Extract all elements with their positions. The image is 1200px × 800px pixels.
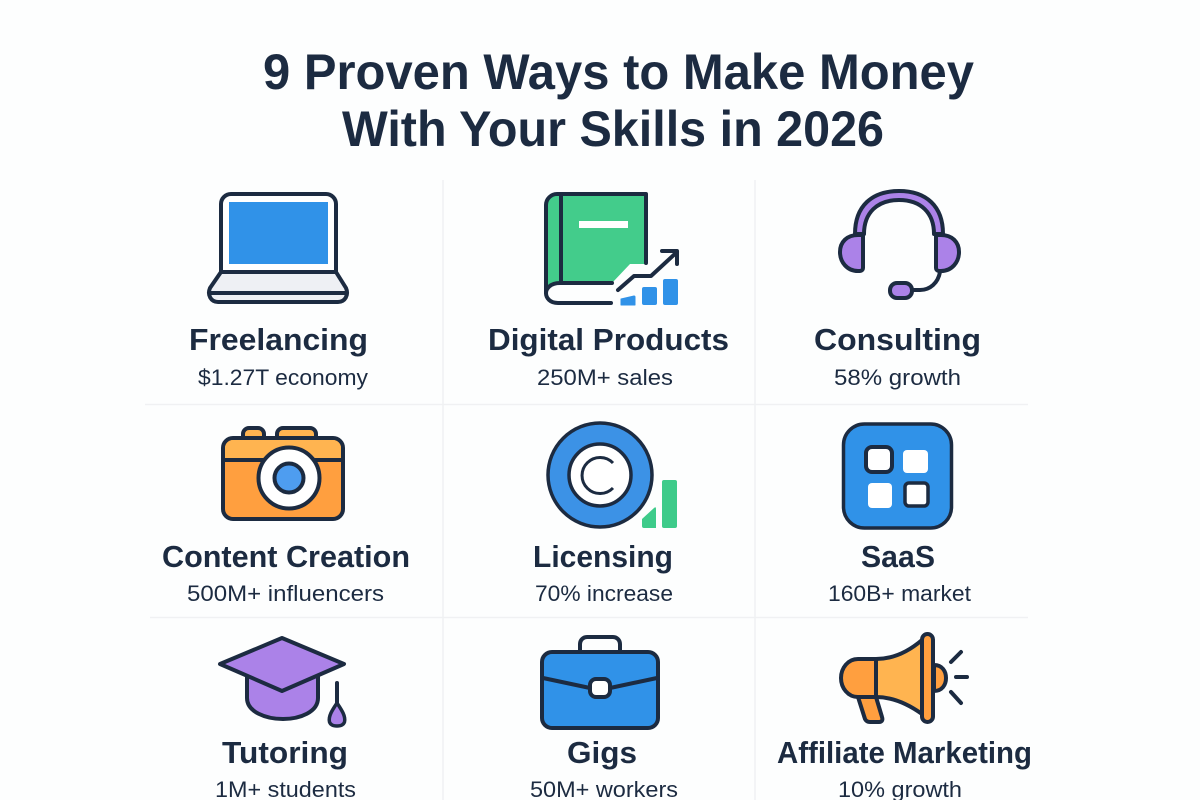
title: 9 Proven Ways to Make Money [263,44,974,100]
heading: Content Creation: Content Creation [162,539,410,574]
panel: Licensing [533,423,677,606]
panel: Digital Products [488,194,729,390]
heading: Digital Products: Digital Products [488,322,729,357]
heading: Gigs: Gigs [567,735,637,770]
title [263,44,974,157]
icon: briefcase [542,637,658,728]
panel: Freelancing [189,194,368,390]
icon: copyright with bars [548,423,677,528]
stat: 160B+ market: 160B+ market [828,581,971,606]
stat: 250M+ sales: 250M+ sales [537,365,673,390]
panel: Gigs [530,637,678,800]
panel: Content Creation [162,428,410,606]
icon: megaphone [841,634,967,722]
icon: laptop [209,194,347,302]
stat: 58% growth: 58% growth [834,365,961,390]
heading: Tutoring: Tutoring [222,735,348,770]
panel: Tutoring [215,638,356,800]
heading: Consulting: Consulting [814,322,981,357]
heading: SaaS: SaaS [861,539,935,574]
icon: book with growth chart [546,194,678,305]
panel: Consulting [814,191,981,390]
heading: Freelancing: Freelancing [189,322,368,357]
icon: headset [840,191,959,298]
title: With Your Skills in 2026 [342,101,884,157]
heading: Licensing: Licensing [533,539,673,574]
panel: Affiliate Marketing [777,634,1032,800]
stat: $1.27T economy: $1.27T economy [198,365,368,390]
icon: camera [223,428,343,519]
heading: Affiliate Marketing: Affiliate Marketing [777,735,1032,770]
panel: SaaS [828,424,971,606]
icon: app grid [844,424,952,528]
icon: graduation cap [220,638,345,726]
stat: 500M+ influencers: 500M+ influencers [187,581,384,606]
stat: 70% increase: 70% increase [535,581,673,606]
